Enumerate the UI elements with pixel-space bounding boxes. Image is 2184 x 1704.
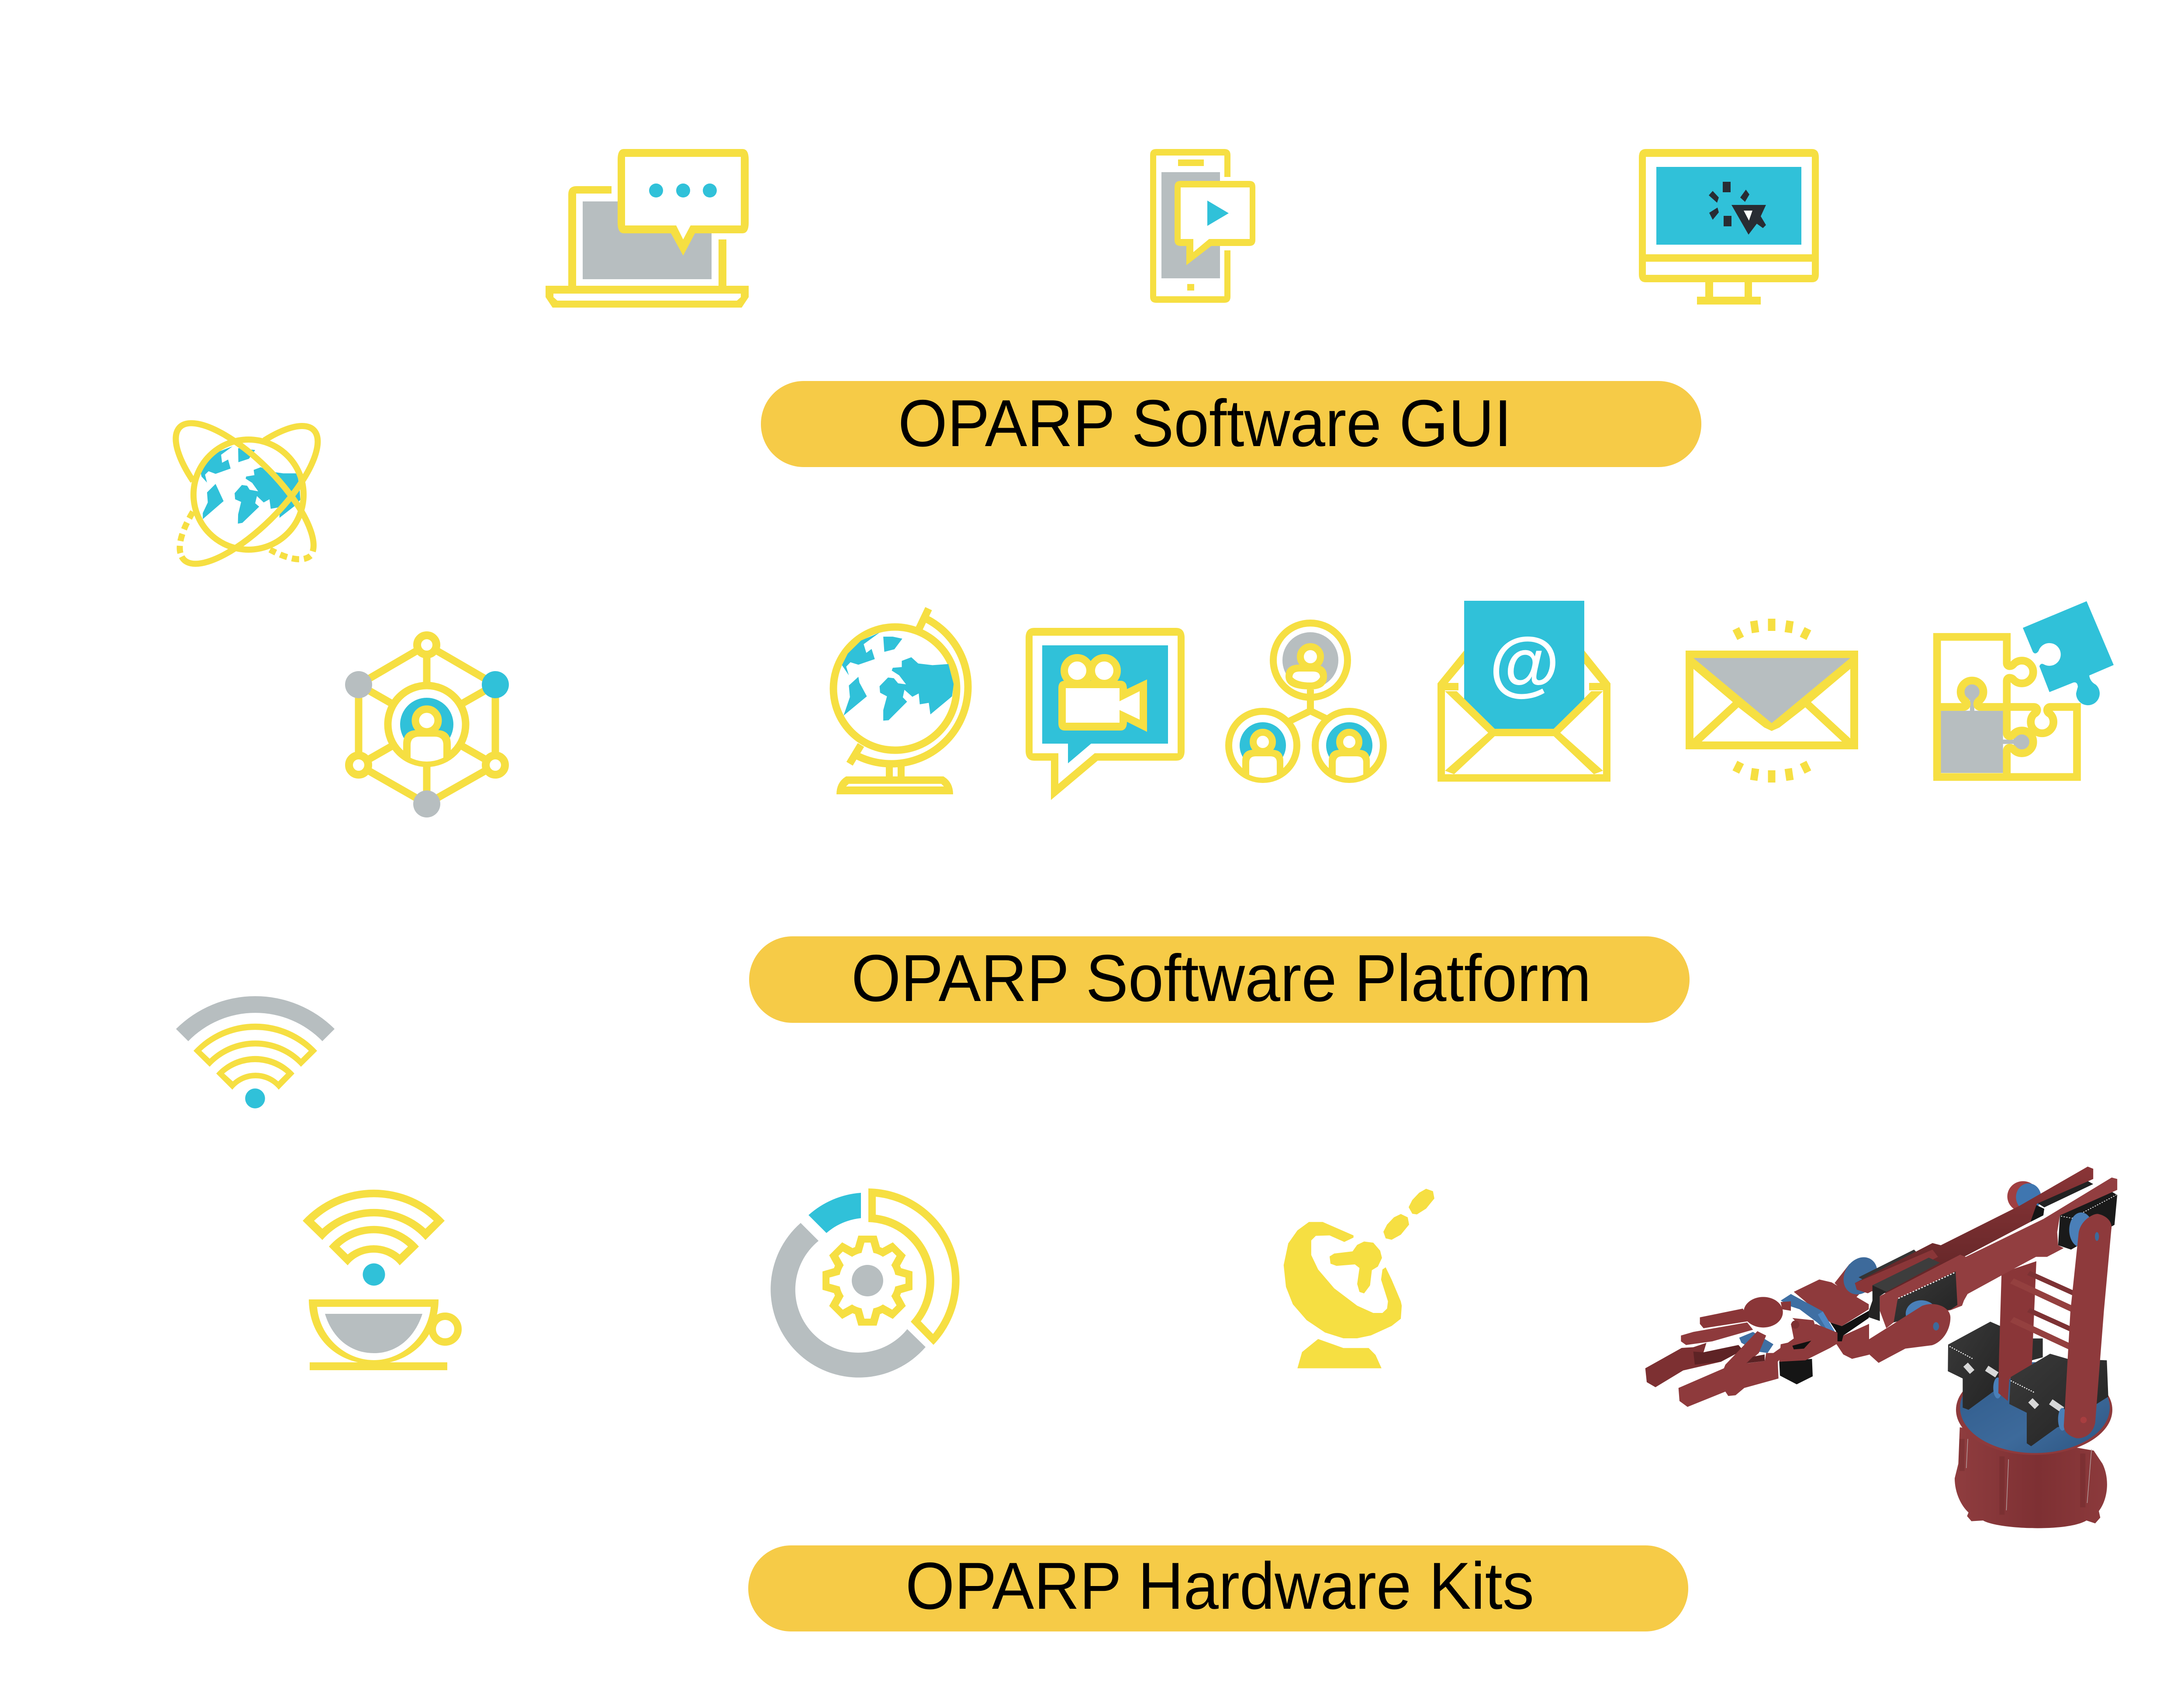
pill: OPARP Software GUI	[761, 381, 1701, 467]
icon: phone with video bubble	[1150, 149, 1255, 303]
icon: user network hexagon	[345, 635, 509, 817]
pill: OPARP Hardware Kits: OPARP Hardware Kits	[905, 1549, 1534, 1623]
robot wrist and gripper	[1645, 1279, 1869, 1407]
icon: desk globe	[833, 609, 968, 794]
icon: globe with orbits	[176, 423, 318, 564]
pill: OPARP Software GUI: OPARP Software GUI	[898, 386, 1512, 461]
icon: wifi signal	[176, 996, 335, 1108]
icon: email envelope with at sign: @	[1489, 623, 1559, 703]
icon: three connected people	[1229, 623, 1383, 782]
icon: laptop with chat bubble	[546, 149, 749, 308]
robot arm illustration	[1645, 1167, 2117, 1528]
infographic canvas	[173, 149, 2118, 1631]
robot elbow bar	[1869, 1304, 1950, 1363]
icon: email envelope with at sign	[1438, 601, 1610, 782]
robot lower assembly: base, turntable, left servo, upright, right servo	[1948, 1261, 2112, 1528]
icon: open envelope with rays	[1686, 619, 1858, 783]
icon: puzzle pieces	[1933, 601, 2114, 777]
pill: OPARP Hardware Kits	[748, 1545, 1688, 1631]
robot main arm	[2064, 1214, 2111, 1438]
icon: gear with ring chart	[771, 1188, 960, 1378]
icon: wifi over coffee cup	[303, 1190, 458, 1370]
icon: desktop monitor with cursor	[1639, 149, 1819, 305]
icon: satellite dish	[1284, 1189, 1434, 1368]
robot upper assembly: ladder, beams, servos, discs	[1835, 1167, 2117, 1347]
pill: OPARP Software Platform: OPARP Software Platform	[851, 941, 1591, 1015]
icon: video chat bubble	[1026, 628, 1185, 800]
